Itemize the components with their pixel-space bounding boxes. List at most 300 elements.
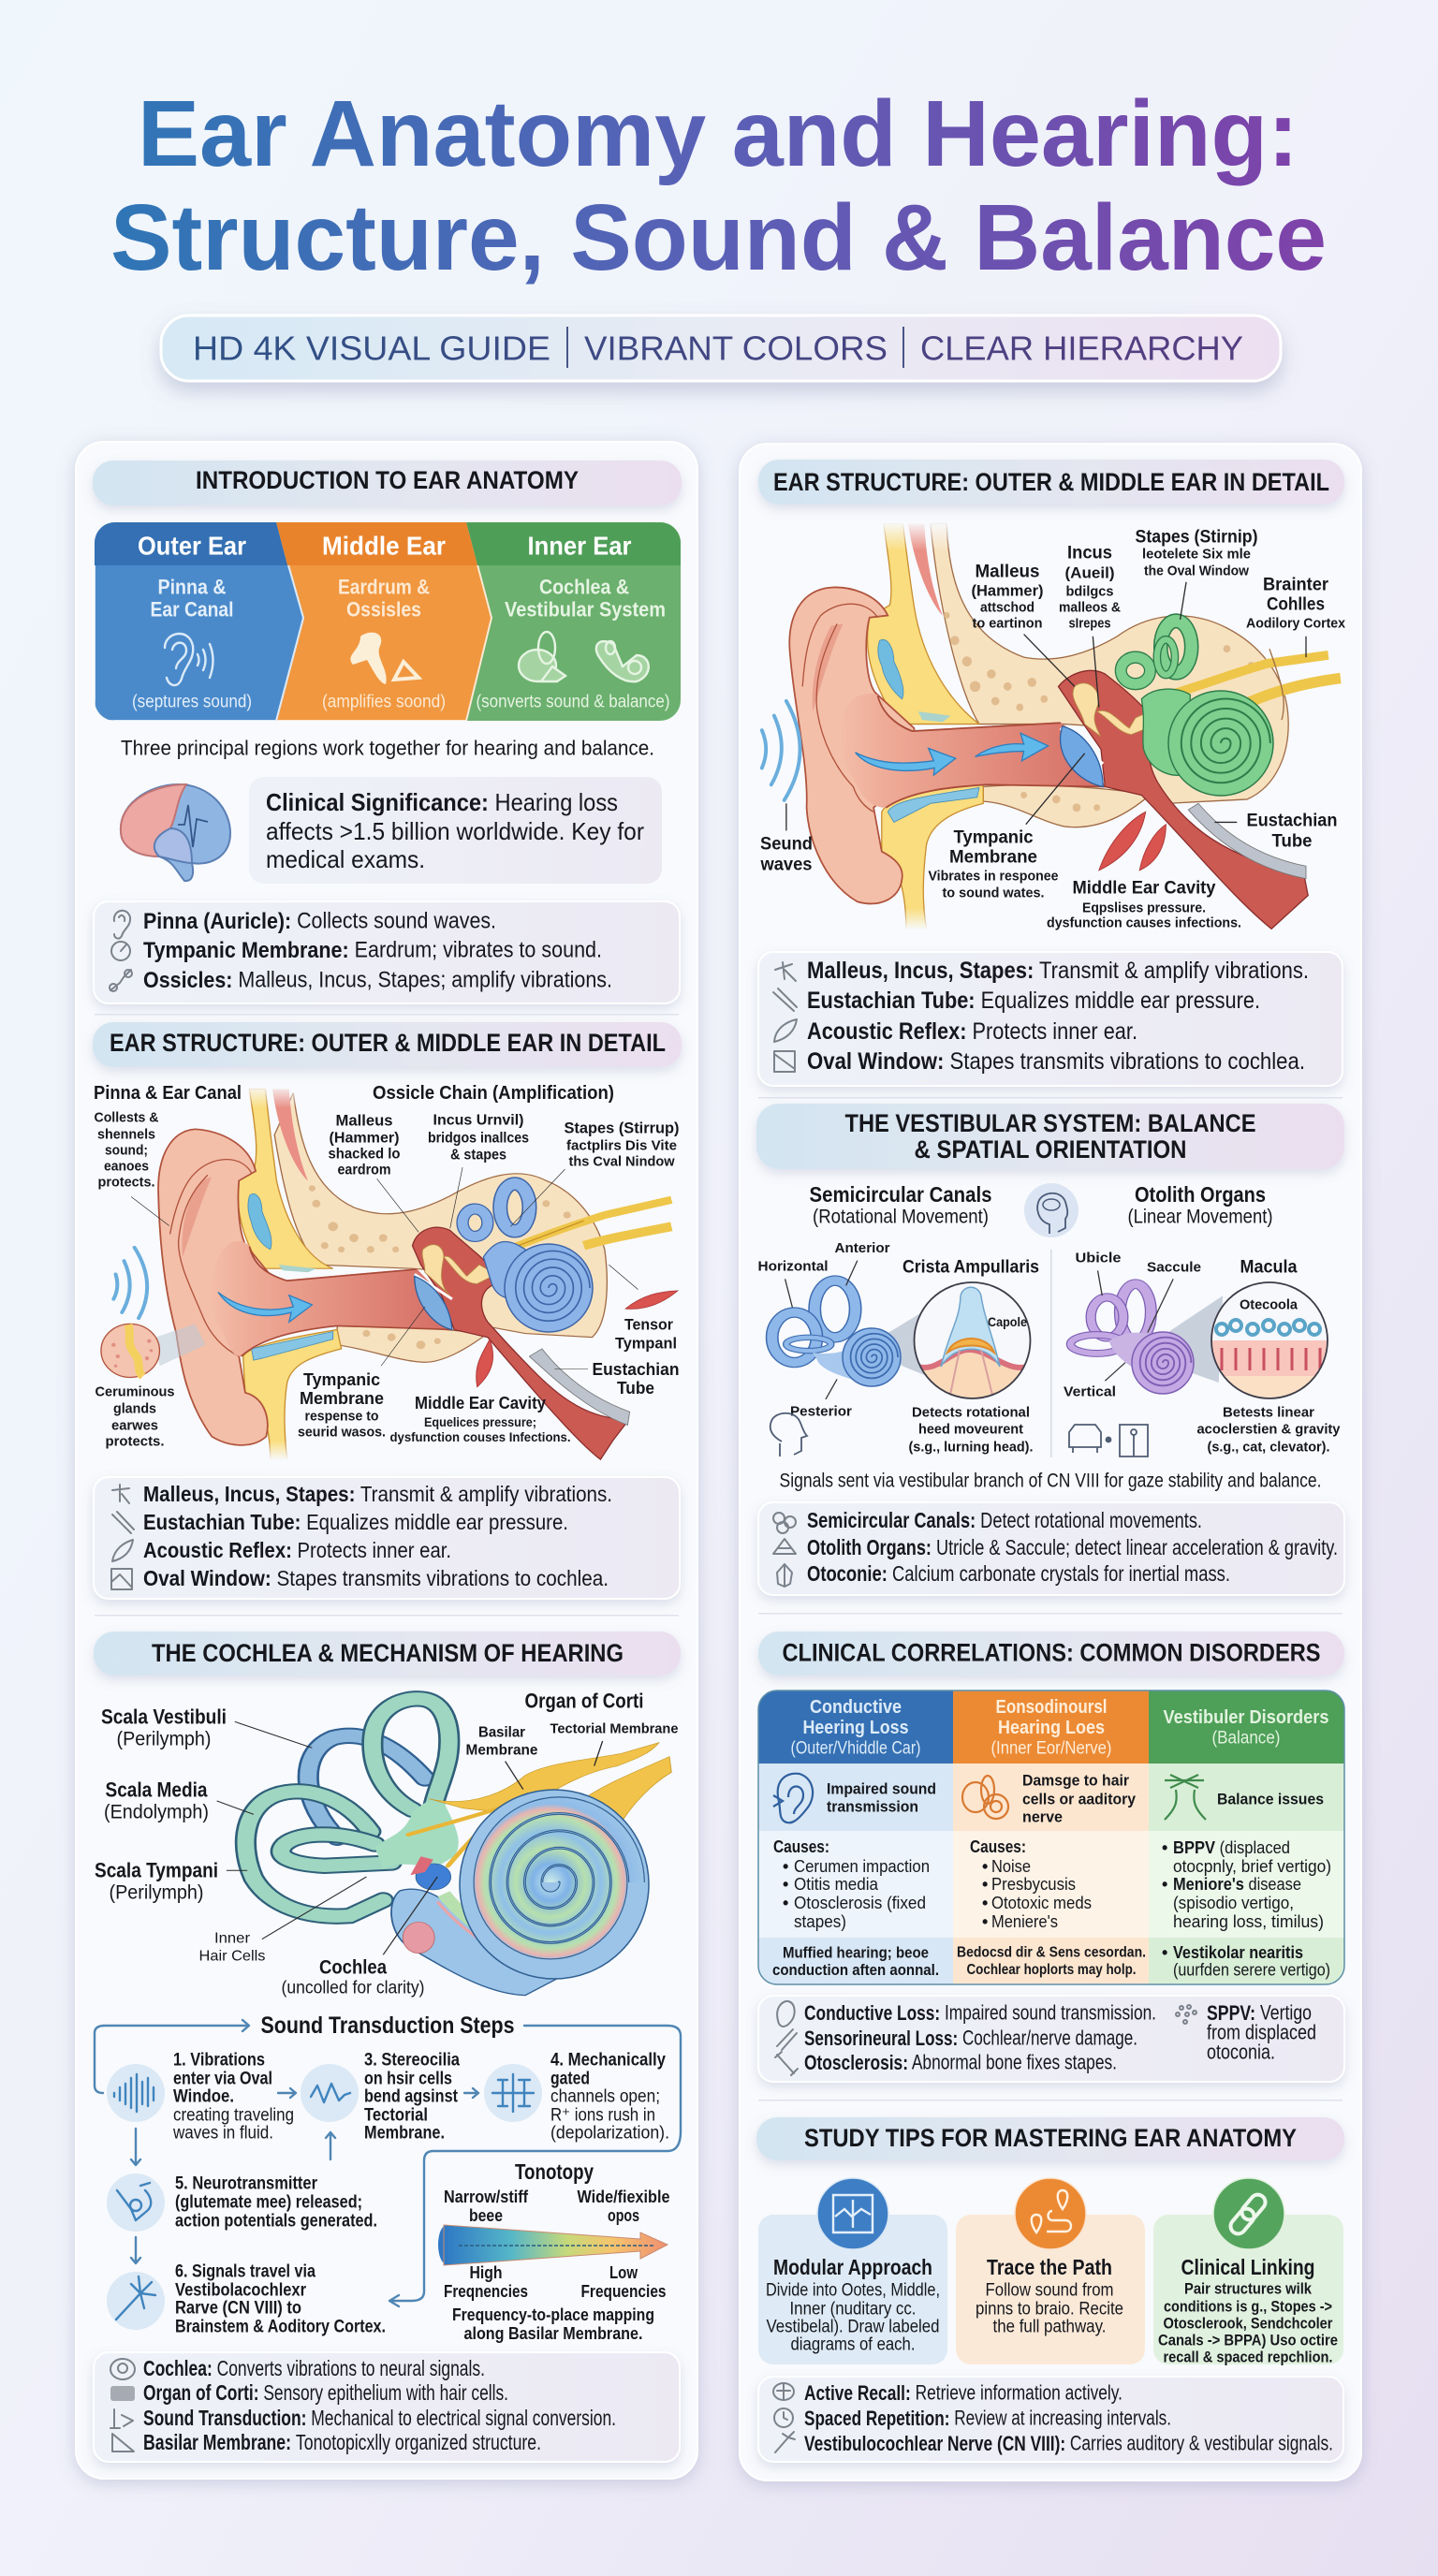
- column: vestibular disorders: •: [1162, 1838, 1167, 1857]
- column: conductive hearing loss: Impaired sound: [827, 1780, 936, 1797]
- label: ceruminous glands: protects.: [105, 1434, 165, 1449]
- label: malleus: to eartinon: [972, 616, 1043, 631]
- tonotopy diagram: along Basilar Membrane.: [464, 2324, 642, 2343]
- label: stapes: leotelete Six mle: [1142, 547, 1251, 562]
- key terms: vestibular: Otoconie: Calcium carbonate crystals for inertial mass.: [807, 1561, 1230, 1586]
- label: incus: bridgos inallces: [428, 1131, 529, 1146]
- icon: ion channels: [484, 2064, 542, 2122]
- subtitle pill: [161, 315, 1281, 381]
- icon: ossicles: [110, 970, 132, 991]
- column: conductive hearing loss: Otosclerosis (fixed: [794, 1894, 926, 1912]
- column: inner ear: Vestibular System: [505, 597, 666, 622]
- labels: semicircular canals parts: Detects rotational: [912, 1404, 1030, 1421]
- icon: tympanic membrane: [111, 942, 130, 960]
- column: outer ear: Outer Ear: [138, 532, 246, 560]
- column: vestibular disorders: •: [1162, 1943, 1167, 1962]
- card: trace the path: Trace the Path: [987, 2255, 1112, 2279]
- label: pinna and ear canal: Collests &: [94, 1110, 159, 1125]
- label: basilar membrane: [466, 1724, 538, 1758]
- label: scala tympani: [95, 1859, 218, 1904]
- label: stapes: ths Cval Nindow: [569, 1153, 675, 1170]
- column: vestibular disorders: [1162, 1707, 1331, 1979]
- tonotopy diagram: Frequencies: [580, 2282, 667, 2301]
- label: eustachian tube: Tube: [1271, 831, 1313, 852]
- icon: ear outline: [777, 2001, 795, 2027]
- disorders table: [758, 1690, 1344, 1984]
- icon: tube: [773, 988, 797, 1011]
- heading: sound transduction steps: Sound Transduction Steps: [260, 2012, 515, 2039]
- note: bppv: [1207, 2001, 1316, 2063]
- column: conductive hearing loss: [772, 1697, 939, 1979]
- card: trace the path: pinns to braio. Recite: [976, 2299, 1123, 2320]
- label: scala media: Scala Media: [105, 1778, 208, 1801]
- label: pinna and ear canal: [94, 1083, 242, 1191]
- label: tympanic membrane: Tympanic: [303, 1370, 380, 1389]
- column: sensorineural hearing loss: Cochlear hoplorts may holp.: [966, 1962, 1137, 1978]
- key terms: study tips: [758, 2377, 1343, 2462]
- card: trace the path: Follow sound from: [985, 2280, 1114, 2301]
- label: otolith organs: (Linear Movement): [1127, 1206, 1273, 1228]
- card: modular approach: Modular Approach: [773, 2255, 932, 2279]
- tonotopy diagram: Low: [609, 2263, 638, 2282]
- ear cross-section illustration: [762, 521, 1341, 929]
- label: stapes: [564, 1120, 680, 1170]
- card: modular approach: Divide into Ootes, Middle,: [766, 2280, 940, 2301]
- label: middle ear cavity: Middle Ear Cavity: [415, 1394, 546, 1412]
- labels: otolith parts: (s.g., cat, clevator).: [1208, 1440, 1329, 1455]
- icon: organ of corti: [110, 2386, 135, 2401]
- key terms: introduction: Tympanic Membrane: Eardrum; vibrates to sound.: [143, 938, 602, 962]
- label: tympanic membrane: Vibrates in responee: [929, 869, 1058, 884]
- column: inner ear: Inner Ear: [528, 532, 632, 560]
- key terms: clinical: Otosclerosis: Abnormal bone fixes stapes.: [804, 2050, 1117, 2074]
- note: bppv: from displaced: [1207, 2020, 1316, 2044]
- column: sensorineural hearing loss: [957, 1697, 1146, 1978]
- step 3: on hsir cells: [364, 2069, 452, 2089]
- tonotopy diagram: beee: [469, 2206, 503, 2225]
- column: conductive hearing loss: Cerumen impaction: [794, 1857, 930, 1876]
- label: pinna and ear canal: protects.: [97, 1174, 155, 1191]
- labels: semicircular canals parts: heed moveurent: [918, 1421, 1023, 1438]
- arrow: step 5 to step 6: [131, 2237, 140, 2263]
- label: brainstem: Cohlles: [1267, 595, 1325, 614]
- labels: otolith parts: acoclerstien & gravity: [1196, 1421, 1341, 1438]
- column: sensorineural hearing loss: cells or aaditory: [1022, 1790, 1137, 1808]
- column: outer ear: Ear Canal: [150, 597, 234, 622]
- icon: ossicle tools: [775, 962, 796, 981]
- section: vestibular system: [756, 1104, 1344, 1595]
- heading: introduction: INTRODUCTION TO EAR ANATOMY: [196, 466, 579, 494]
- key terms: ear structure: [94, 1477, 680, 1599]
- key terms: introduction: [94, 901, 680, 1003]
- label: stapes: factplirs Dis Vite: [566, 1138, 677, 1153]
- icon: pinna: [114, 911, 130, 939]
- column: sensorineural hearing loss: Damsge to hair: [1022, 1771, 1129, 1790]
- label: otolith organs: Otolith Organs: [1135, 1182, 1266, 1207]
- card: clinical linking: Canals -> BPPA) Uso octire: [1158, 2331, 1338, 2349]
- column: vestibular disorders: (spisodio vertigo,: [1173, 1894, 1294, 1912]
- label: tympanic membrane: Membrane: [949, 848, 1037, 867]
- subtitle pill: CLEAR HIERARCHY: [920, 329, 1243, 367]
- icon: canals: [773, 1513, 796, 1533]
- card: modular approach: diagrams of each.: [790, 2334, 916, 2355]
- label: eustachian tube: Eustachian: [1247, 811, 1337, 831]
- icon: car and elevator: [1069, 1425, 1148, 1456]
- tonotopy diagram: opos: [608, 2206, 639, 2225]
- label: organ of corti: Organ of Corti: [524, 1689, 644, 1713]
- icon: brain: [121, 784, 230, 881]
- label: incus: [428, 1112, 529, 1163]
- icon: nerve: [775, 2432, 795, 2452]
- caption: signals: Signals sent via vestibular branch of CN VIII for gaze stability and balance.: [779, 1470, 1322, 1492]
- label: ossicle chain: Ossicle Chain (Amplification): [373, 1083, 614, 1104]
- label: scala vestibuli: Scala Vestibuli: [101, 1705, 227, 1728]
- card: clinical linking: recall & spaced repchlion.: [1163, 2348, 1333, 2366]
- key terms: vestibular: Semicircular Canals: Detect rotational movements.: [807, 1508, 1202, 1532]
- step 3: bend agsinst: [364, 2087, 459, 2106]
- label: middle ear cavity: [1047, 878, 1241, 930]
- key terms: study tips: Active Recall: Retrieve information actively.: [804, 2381, 1123, 2404]
- crista ampullaris inset: [913, 1282, 1034, 1404]
- diagram: otolith organs: [1070, 1270, 1329, 1404]
- column: sensorineural hearing loss: •: [982, 1857, 988, 1876]
- key terms: cochlea: Basilar Membrane: Tonotopicxlly organized structure.: [143, 2430, 541, 2454]
- column: sensorineural hearing loss: •: [982, 1912, 988, 1931]
- icon: nerve: [107, 2272, 165, 2330]
- label: middle ear cavity: dysfunction couses Infections.: [389, 1429, 571, 1444]
- label: malleus: eardrom: [337, 1163, 391, 1178]
- icon: oval window: [774, 1051, 795, 1072]
- diagram: semicircular canals: [772, 1261, 1034, 1404]
- key terms: ear structure: Malleus, Incus, Stapes: Transmit & amplify vibrations.: [807, 958, 1309, 984]
- label: middle ear cavity: [389, 1394, 571, 1444]
- column: conductive hearing loss: •: [783, 1875, 788, 1894]
- caption: three regions: Three principal regions work together for hearing and balance.: [121, 736, 654, 760]
- icon: bone: [775, 2052, 798, 2075]
- card: modular approach: Vestibelal). Draw labeled: [766, 2318, 940, 2336]
- column: conductive hearing loss: (Outer/Vhiddle Car): [790, 1739, 921, 1758]
- label: middle ear cavity: dysfunction causes infections.: [1047, 915, 1241, 930]
- label: incus: sIrepes: [1069, 616, 1110, 631]
- callout: clinical significance: Clinical Significance: Hearing loss: [266, 788, 618, 816]
- label: incus: (Aueil): [1065, 564, 1114, 582]
- labels: otolith parts: Saccule: [1147, 1260, 1201, 1275]
- step 1: 1. Vibrations: [173, 2050, 265, 2071]
- label: tympanic membrane: [298, 1370, 386, 1440]
- icon: tube: [112, 1512, 134, 1533]
- label: incus: malleos &: [1059, 599, 1121, 616]
- key terms: ear structure: Malleus, Incus, Stapes: Transmit & amplify vibrations.: [143, 1482, 612, 1506]
- icon: muscle: [112, 1540, 133, 1561]
- section: introduction to ear anatomy: [93, 461, 682, 1003]
- labels: otolith parts: Otecoola: [1240, 1297, 1299, 1312]
- label: pinna and ear canal: sound;: [105, 1142, 148, 1159]
- column: vestibular disorders: •: [1162, 1875, 1167, 1894]
- label: incus: Incus Urnvil): [433, 1112, 524, 1129]
- callout: clinical significance: medical exams.: [266, 845, 425, 873]
- step 3: 3. Stereocilia: [364, 2050, 460, 2071]
- key terms: clinical: [758, 1996, 1344, 2082]
- key terms: study tips: Spaced Repetition: Review at increasing intervals.: [804, 2406, 1171, 2430]
- three region banner: [95, 522, 681, 721]
- icon: rotating head: [770, 1413, 807, 1456]
- column: sensorineural hearing loss: Presbycusis: [991, 1875, 1076, 1894]
- label: middle ear cavity: Equelices pressure;: [424, 1414, 536, 1429]
- key terms: ear structure: Eustachian Tube: Equalizes middle ear pressure.: [143, 1510, 568, 1534]
- label: tensor tympani: Tympanl: [615, 1335, 677, 1352]
- column: middle ear: Eardrum &: [338, 575, 430, 599]
- step 1: waves in fluid.: [172, 2123, 273, 2144]
- key terms: introduction: Pinna (Auricle): Collects sound waves.: [143, 908, 496, 934]
- column: vestibular disorders: BPPV (displaced: [1173, 1838, 1290, 1857]
- icon: crystal: [777, 1564, 792, 1587]
- label: tensor tympani: Tensor: [624, 1316, 673, 1333]
- callout: clinical significance: affects >1.5 billion worldwide. Key for: [266, 817, 644, 845]
- column: conductive hearing loss: •: [783, 1894, 788, 1912]
- card: clinical linking: conditions is g., Stopes ->: [1164, 2297, 1332, 2316]
- heading: study tips: STUDY TIPS FOR MASTERING EAR ANATOMY: [804, 2124, 1297, 2152]
- column: sensorineural hearing loss: Noise: [991, 1857, 1031, 1876]
- label: tympanic membrane: seurid wasos.: [298, 1425, 386, 1440]
- column: inner ear: Cochlea &: [539, 575, 629, 599]
- heading: cochlea: THE COCHLEA & MECHANISM OF HEARING: [152, 1639, 624, 1667]
- label: semicircular canals: [809, 1182, 992, 1228]
- icon: ossicle tools: [112, 1485, 129, 1503]
- icon: head with brain: [1024, 1183, 1078, 1237]
- column: sensorineural hearing loss: Ototoxic meds: [991, 1894, 1092, 1912]
- label: cochlea: (uncolled for clarity): [281, 1979, 425, 1998]
- card: trace the path: [956, 2178, 1145, 2364]
- arrow: step 1 down to step 5: [131, 2129, 140, 2165]
- tonotopy diagram: High: [470, 2263, 502, 2282]
- heading: cochlea: [94, 1632, 681, 1676]
- callout: clinical significance: [249, 777, 662, 884]
- key terms: ear structure: [758, 952, 1343, 1086]
- card: clinical linking: Clinical Linking: [1181, 2255, 1314, 2279]
- heading: study tips: [756, 2117, 1344, 2160]
- icon: membrane: [112, 2434, 134, 2452]
- heading: ear structure: EAR STRUCTURE: OUTER & MIDDLE EAR IN DETAIL: [773, 468, 1329, 496]
- section: cochlea and mechanism of hearing: [94, 1632, 681, 2462]
- key terms: cochlea: [94, 2352, 680, 2462]
- icon: waveform: [107, 2064, 165, 2122]
- arrow: up to step 3: [326, 2132, 335, 2159]
- label: ceruminous glands: Ceruminous: [95, 1383, 174, 1400]
- column: sensorineural hearing loss: Eonsodinoursl: [996, 1697, 1107, 1718]
- icon: cochlea: [110, 2359, 135, 2379]
- label: tympanic membrane: [929, 827, 1058, 900]
- label: ceruminous glands: glands: [113, 1400, 156, 1417]
- labels: otolith parts: Betests linear: [1223, 1404, 1314, 1421]
- title: [110, 81, 1327, 290]
- section: ear structure right: [758, 460, 1346, 1086]
- section: study tips: [756, 2117, 1344, 2462]
- label: incus: & stapes: [450, 1148, 506, 1163]
- label: scala vestibuli: [101, 1705, 227, 1750]
- step 5: 5. Neurotransmitter: [175, 2174, 318, 2194]
- step 5: action potentials generated.: [175, 2211, 377, 2232]
- labels: semicircular canals parts: Anterior: [835, 1240, 890, 1256]
- title: Ear Anatomy and Hearing:: [138, 81, 1299, 186]
- column: vestibular disorders: (Balance): [1211, 1728, 1281, 1749]
- step 4: gated: [550, 2069, 590, 2089]
- label: scala vestibuli: (Perilymph): [116, 1728, 212, 1750]
- icon: crystals: [1176, 2005, 1196, 2024]
- key terms: vestibular: Otolith Organs: Utricle & Saccule; detect linear acceleration & gravity.: [807, 1535, 1338, 1559]
- step 6: Brainstem & Aoditory Cortex.: [175, 2318, 386, 2336]
- key terms: cochlea: Organ of Corti: Sensory epithelium with hair cells.: [143, 2380, 508, 2405]
- tonotopy diagram: Frequency-to-place mapping: [452, 2305, 654, 2324]
- icon: wave bend: [301, 2064, 359, 2122]
- label: scala tympani: (Perilymph): [109, 1881, 204, 1904]
- key terms: ear structure: Oval Window: Stapes transmits vibrations to cochlea.: [143, 1566, 609, 1590]
- label: malleus: [328, 1112, 401, 1178]
- labels: semicircular canals parts: Horizontal: [758, 1258, 828, 1275]
- label: malleus: shacked lo: [328, 1146, 401, 1163]
- key terms: clinical: Sensorineural Loss: Cochlear/nerve damage.: [804, 2026, 1137, 2050]
- subtitle pill: HD 4K VISUAL GUIDE: [193, 329, 550, 367]
- label: inner hair cells: [198, 1930, 266, 1964]
- labels: otolith parts: Vertical: [1064, 1383, 1116, 1400]
- labels: otolith parts: [1064, 1251, 1341, 1455]
- step 6: Rarve (CN VIII) to: [175, 2299, 301, 2318]
- label: stapes: the Oval Window: [1144, 564, 1249, 578]
- label: malleus: [972, 562, 1043, 631]
- step 3: [364, 2050, 460, 2144]
- step 3: Tectorial: [364, 2106, 428, 2125]
- column: sensorineural hearing loss: Meniere's: [991, 1912, 1058, 1931]
- label: cochlea: [281, 1956, 425, 1998]
- label: sound waves: Seund: [760, 835, 813, 854]
- panel: left column: [76, 442, 697, 2479]
- label: stapes: [1135, 528, 1258, 578]
- label: otolith organs: [1127, 1182, 1273, 1228]
- label: pinna and ear canal: Pinna & Ear Canal: [94, 1083, 242, 1104]
- key terms: vestibular: [758, 1502, 1344, 1595]
- tonotopy diagram: Narrow/stiff: [444, 2188, 529, 2206]
- heading: ear structure: EAR STRUCTURE: OUTER & MIDDLE EAR IN DETAIL: [110, 1029, 666, 1057]
- cochlea illustration: [217, 1699, 671, 1996]
- column: conductive hearing loss: •: [783, 1857, 788, 1876]
- step 6: [175, 2261, 386, 2336]
- column: sensorineural hearing loss: •: [982, 1894, 988, 1912]
- label: incus: Incus: [1067, 543, 1112, 564]
- labels: otolith parts: Macula: [1240, 1258, 1298, 1277]
- label: stapes: Stapes (Stirrup): [564, 1120, 680, 1136]
- column: middle ear: Ossisles: [346, 597, 421, 622]
- column: sensorineural hearing loss: Hearing Loes: [998, 1718, 1105, 1738]
- step 4: 4. Mechanically: [550, 2050, 666, 2071]
- heading: vestibular system: & SPATIAL ORIENTATION: [914, 1135, 1187, 1164]
- label: pinna and ear canal: eanoes: [104, 1159, 149, 1174]
- panel: right column: [740, 444, 1361, 2481]
- label: ceruminous glands: [95, 1383, 174, 1449]
- key terms: ear structure: Eustachian Tube: Equalizes middle ear pressure.: [807, 988, 1260, 1014]
- heading: vestibular system: [756, 1104, 1344, 1169]
- sound transduction steps: [95, 2012, 681, 2343]
- column: conductive hearing loss: conduction aften aonnal.: [772, 1961, 939, 1979]
- label: scala media: (Endolymph): [104, 1801, 209, 1823]
- label: basilar membrane: Membrane: [466, 1743, 538, 1758]
- column: vestibular disorders: otocpnly, brief vertigo): [1173, 1857, 1331, 1876]
- column: conductive hearing loss: Causes:: [773, 1837, 829, 1856]
- label: tympanic membrane: to sound wates.: [942, 886, 1045, 900]
- column: vestibular disorders: Vestibuler Disorders: [1163, 1707, 1329, 1728]
- section: clinical correlations: [758, 1632, 1344, 2082]
- column: outer ear: (septures sound): [132, 693, 252, 711]
- column: vestibular disorders: Vestikolar nearitis: [1173, 1943, 1303, 1962]
- label: brainstem: Brainter: [1263, 575, 1329, 595]
- label: brainstem: [1246, 575, 1346, 631]
- label: inner hair cells: Hair Cells: [198, 1949, 266, 1964]
- label: cochlea: Cochlea: [319, 1956, 387, 1979]
- column: conductive hearing loss: transmission: [827, 1797, 918, 1816]
- card: clinical linking: [1153, 2178, 1343, 2366]
- label: inner hair cells: Inner: [214, 1930, 251, 1947]
- label: pinna and ear canal: shennels: [97, 1127, 155, 1142]
- key terms: ear structure: Acoustic Reflex: Protects inner ear.: [807, 1018, 1137, 1045]
- label: basilar membrane: Basilar: [478, 1724, 525, 1741]
- column: vestibular disorders: (uurfden serere vertigo): [1173, 1960, 1330, 1979]
- step 3: Membrane.: [364, 2123, 445, 2144]
- column: vestibular disorders: hearing loss, timilus): [1173, 1912, 1324, 1931]
- tonotopy arrow: [438, 2225, 668, 2265]
- label: malleus: Malleus: [976, 562, 1039, 582]
- icon: route pin: [1015, 2178, 1086, 2249]
- label: sound waves: waves: [760, 856, 813, 874]
- key terms: cochlea: Cochlea: Converts vibrations to neural signals.: [143, 2356, 485, 2380]
- column: conductive hearing loss: stapes): [794, 1912, 846, 1931]
- section: ear structure left: [93, 1022, 682, 1599]
- label: scala media: [104, 1778, 209, 1823]
- label: malleus: (Hammer): [330, 1131, 399, 1146]
- icon: clock: [774, 2408, 793, 2427]
- column: outer ear: Pinna &: [157, 575, 227, 599]
- column: conductive hearing loss: Muffied hearing; beoe: [783, 1943, 929, 1962]
- label: incus: [1059, 543, 1121, 631]
- tonotopy diagram: Tonotopy: [515, 2159, 594, 2184]
- column: conductive hearing loss: Conductive: [810, 1697, 902, 1718]
- label: tympanic membrane: Membrane: [300, 1389, 384, 1408]
- labels: semicircular canals parts: Crista Ampullaris: [902, 1258, 1039, 1277]
- note: bppv: otoconia.: [1207, 2041, 1275, 2063]
- column: sensorineural hearing loss: Causes:: [970, 1837, 1026, 1856]
- label: tympanic membrane: respense to: [305, 1408, 378, 1425]
- heading: clinical correlations: CLINICAL CORRELATIONS: COMMON DISORDERS: [783, 1638, 1320, 1666]
- step 1: [172, 2050, 294, 2144]
- label: tectorial membrane: Tectorial Membrane: [550, 1720, 678, 1737]
- icon: chain link: [1213, 2178, 1284, 2249]
- step 5: [175, 2174, 377, 2232]
- label: middle ear cavity: Middle Ear Cavity: [1073, 878, 1216, 899]
- icon: muscle: [774, 1019, 797, 1042]
- label: tensor tympani: [615, 1316, 677, 1352]
- step 1: Windoe.: [173, 2087, 234, 2106]
- heading: clinical correlations: [758, 1632, 1344, 1676]
- labels: semicircular canals parts: (s.g., lurning head).: [908, 1440, 1034, 1455]
- column: sensorineural hearing loss: Bedocsd dir & Sens cesordan.: [957, 1945, 1146, 1960]
- key terms: introduction: Ossicles: Malleus, Incus, Stapes; amplify vibrations.: [143, 968, 612, 992]
- step 1: creating traveling: [173, 2106, 294, 2125]
- icon: neurotransmitter: [107, 2174, 165, 2232]
- labels: otolith parts: Ubicle: [1075, 1251, 1122, 1266]
- column: sensorineural hearing loss: nerve: [1022, 1808, 1063, 1825]
- step 6: 6. Signals travel via: [175, 2261, 315, 2282]
- arrow: step 3 to step 4: [464, 2088, 478, 2098]
- flow frame lines: [95, 2020, 681, 2306]
- labels: semicircular canals parts: [758, 1240, 1039, 1455]
- column: inner ear: (sonverts sound & balance): [476, 693, 670, 711]
